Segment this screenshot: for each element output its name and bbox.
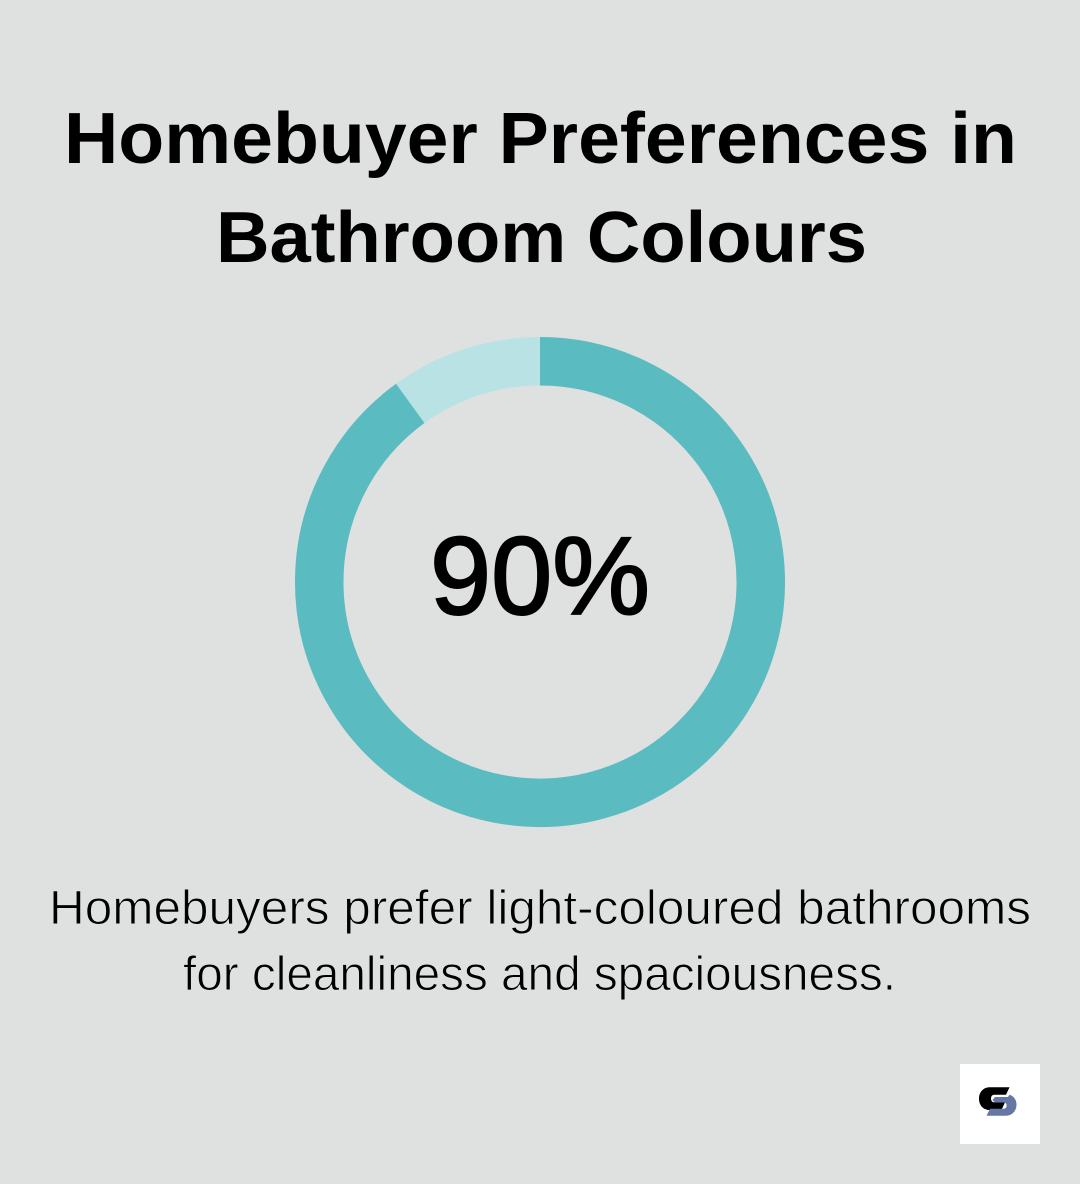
description text: [49, 882, 1031, 1001]
donut value segment: 90%: [319, 361, 761, 803]
description text: Homebuyers prefer light-coloured bathrooms: [49, 882, 1031, 935]
logo badge: [960, 1064, 1040, 1144]
donut chart: 90%: [319, 361, 761, 803]
title: Homebuyer Preferences in: [64, 99, 1017, 179]
donut track segment: remaining 10%: [410, 361, 540, 403]
logo mark: black S: [979, 1087, 1010, 1110]
title: Bathroom Colours: [216, 198, 867, 278]
center value: 90%: [430, 515, 650, 638]
description text: for cleanliness and spaciousness.: [183, 948, 896, 1001]
title: [64, 99, 1017, 278]
logo mark: blue D: [986, 1095, 1016, 1116]
